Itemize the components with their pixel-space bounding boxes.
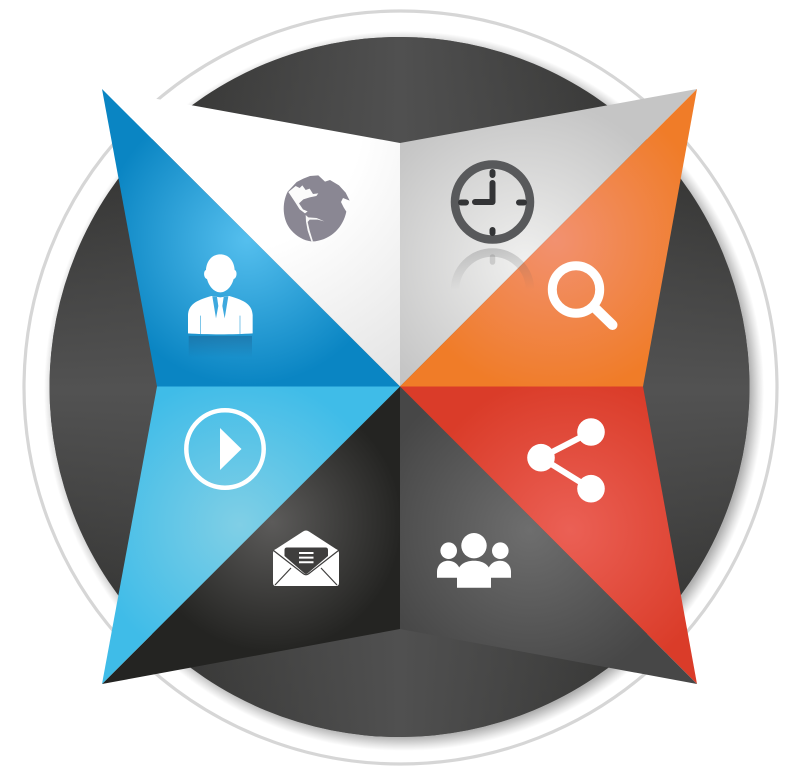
clock reflection: [452, 248, 533, 282]
icon: team: [437, 533, 511, 588]
icon: share: [527, 418, 605, 503]
panel: dark grey team fold: [400, 386, 697, 684]
tie gaps: [212, 296, 228, 318]
icon: person: [188, 254, 253, 357]
panel: white globe fold: [102, 89, 400, 386]
icon: play button: [186, 410, 264, 488]
arm lines: [201, 316, 240, 334]
panel: black mail fold: [102, 386, 400, 684]
head: [204, 254, 237, 292]
icon: clock: [455, 164, 530, 240]
suit body: [188, 296, 253, 334]
letter lines: [299, 553, 314, 562]
clock hands and ticks: [461, 172, 524, 233]
panel: red share fold: [400, 386, 697, 684]
icon: globe: [284, 175, 350, 241]
icon reflection: [189, 336, 252, 357]
dark central disc: [50, 37, 750, 737]
icon: envelope: [273, 530, 339, 586]
panel: orange search fold: [400, 89, 697, 386]
panel: light blue play fold: [102, 386, 400, 684]
panel: blue person fold: [102, 89, 400, 386]
icon: magnifier: [552, 266, 612, 325]
panel: grey clock fold: [400, 89, 697, 386]
